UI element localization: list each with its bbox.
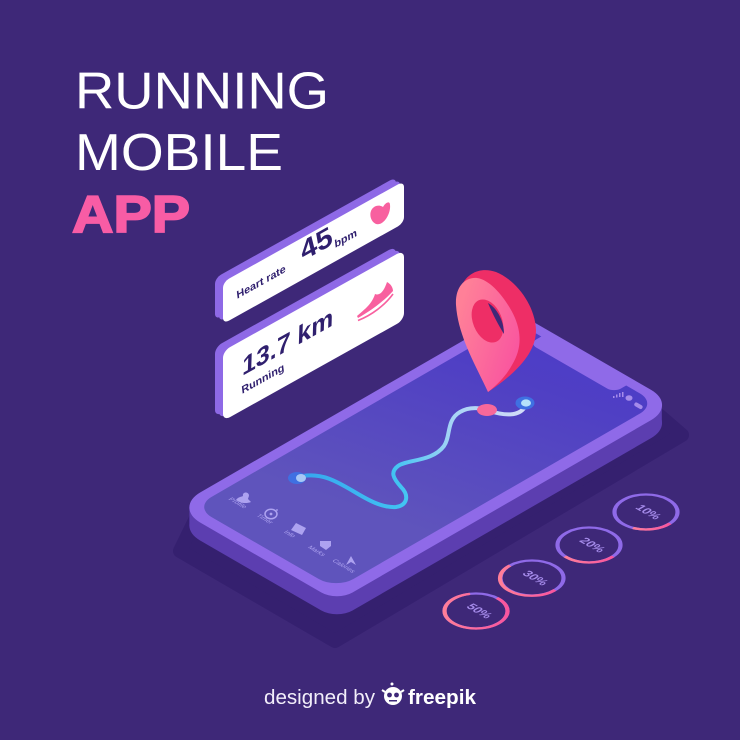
pin front [456, 278, 520, 392]
title: MOBILE [75, 124, 283, 182]
title [72, 62, 329, 244]
route start marker [288, 472, 306, 484]
phone notch [529, 332, 633, 392]
phone shadow [180, 416, 682, 641]
pin hole see-through [488, 303, 504, 334]
pin back [462, 270, 536, 392]
map pin [456, 270, 536, 392]
progress ring: 50%: 50% [463, 601, 496, 621]
progress ring: 30%: 30% [519, 568, 552, 588]
designed by: designed by [264, 687, 375, 709]
card face [223, 250, 404, 421]
route current position [477, 404, 497, 416]
phone rim [174, 311, 677, 602]
menu item: marks: Marks [306, 545, 328, 558]
menu item: info [282, 523, 306, 539]
freepik wordmark: freepik [408, 687, 477, 709]
phone side [174, 329, 677, 620]
progress ring: 30% [500, 561, 564, 596]
card side [215, 177, 400, 322]
pin hole [466, 295, 509, 347]
icon: freepik mascot [382, 682, 404, 705]
card: running [215, 246, 404, 421]
menu item: calories: Calories [330, 559, 357, 574]
icon: running shoe [357, 282, 393, 320]
footer credit [264, 682, 477, 709]
card side [215, 246, 400, 419]
phone [174, 311, 677, 620]
distance value: 13.7 km [242, 302, 334, 382]
phone screen [194, 322, 657, 589]
heart rate label: Heart rate [236, 263, 286, 302]
progress ring: 10% [614, 495, 678, 529]
running label: Running [241, 362, 285, 397]
progress ring: 10%: 10% [632, 502, 665, 522]
progress ring: 20% [558, 528, 620, 562]
route end marker [516, 396, 534, 410]
heart rate unit: bpm [334, 227, 357, 251]
route line [303, 405, 526, 507]
card: heart rate [215, 177, 404, 324]
menu item: profile: Profile [226, 497, 249, 510]
title: RUNNING [75, 62, 329, 120]
progress ring: 50% [444, 594, 508, 628]
menu item: marks [306, 541, 331, 558]
menu item: info: Info [282, 530, 297, 539]
heart rate value: 45 [297, 221, 336, 267]
status icons [613, 392, 643, 410]
card face [223, 181, 404, 324]
menu item: timer [254, 509, 278, 526]
menu item: profile [226, 492, 251, 510]
title: APP [72, 186, 190, 244]
icon: heart [370, 202, 390, 224]
progress ring: 20%: 20% [576, 535, 609, 555]
menu item: timer: Timer [254, 513, 275, 526]
